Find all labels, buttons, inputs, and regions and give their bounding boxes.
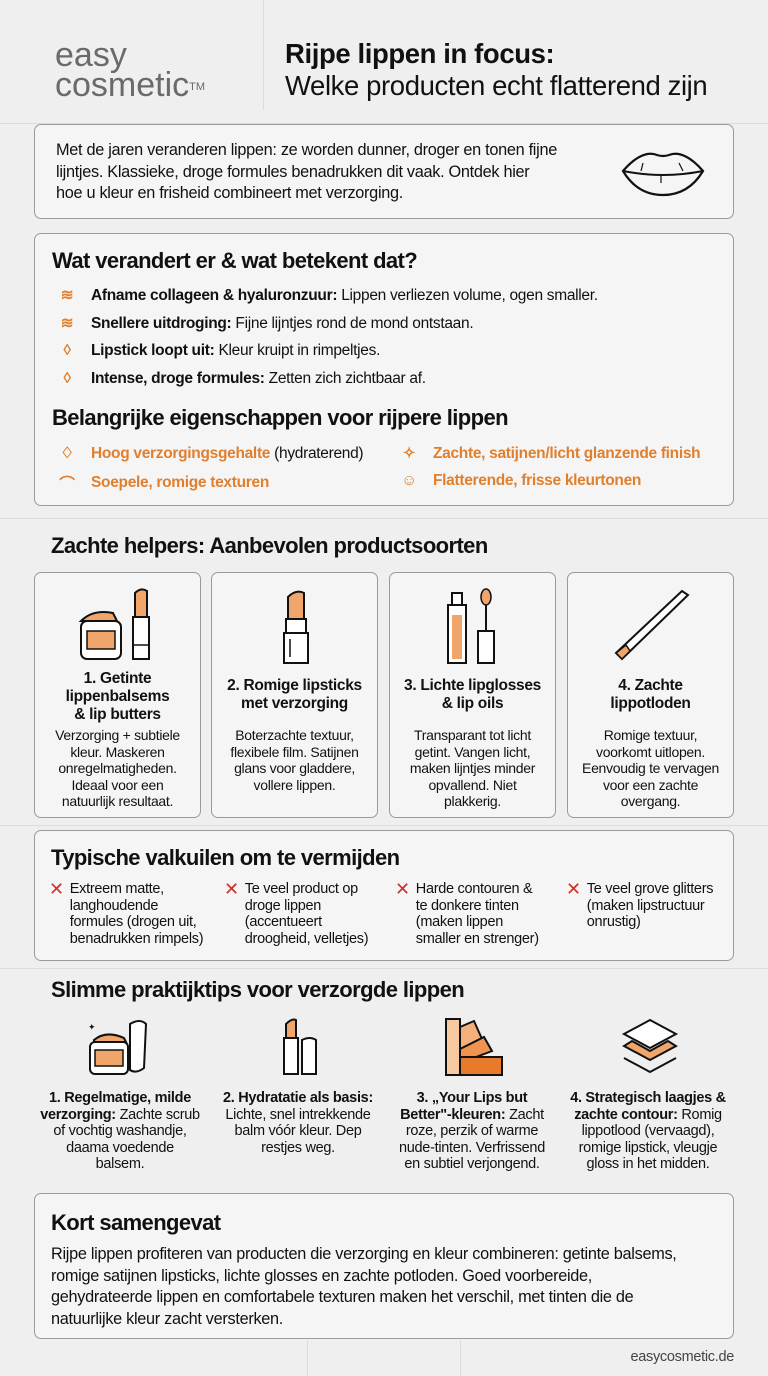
properties list: Hoog verzorgingsgehalte (hydraterend): [91, 444, 363, 462]
icon: lip pencil: [614, 590, 690, 660]
card 1: & lip butters: [74, 706, 161, 723]
card 3: 3. Lichte lipglosses: [404, 677, 541, 694]
change list: Lipstick loopt uit: Kleur kruipt in rimpeltjes.: [91, 342, 380, 359]
change list: [61, 286, 598, 387]
tip 3: 3. „Your Lips but Better"-kleuren: Zacht roze, perzik of warme nude-tinten. Verfrissend en subtiel verjongend.: [399, 1090, 545, 1172]
properties list: Zachte, satijnen/licht glanzende finish: [433, 444, 700, 462]
card 4: lippotloden: [610, 695, 691, 712]
pitfall 2: droge lippen: [245, 898, 321, 914]
heading: products: Zachte helpers: Aanbevolen productsoorten: [51, 533, 488, 558]
icon: lipstick: [283, 1018, 317, 1075]
summary text: [51, 1245, 677, 1328]
icon: jar with cloth: ✦: [88, 1022, 96, 1032]
pitfall 3: ✕: [395, 879, 410, 899]
pitfall 3: te donkere tinten: [416, 898, 519, 914]
heading: changes: Wat verandert er & wat betekent dat?: [52, 248, 417, 273]
intro text: Met de jaren veranderen lippen: ze worden dunner, droger en tonen fijne: [56, 141, 557, 159]
tip 4: 4. Strategisch laagjes & zachte contour: Romig lippotlood (vervaagd), romige lipstick, vleugje gloss in het midden.: [570, 1090, 726, 1172]
properties list: [59, 444, 700, 493]
footer url: easycosmetic.de: [630, 1349, 734, 1365]
icon: lipstick: [283, 590, 309, 664]
heading: properties: Belangrijke eigenschappen voor rijpere lippen: [52, 405, 508, 430]
pitfall 1: benadrukken rimpels): [70, 930, 203, 946]
pitfall 4: [566, 879, 713, 930]
pitfall 2: droogheid, velletjes): [245, 930, 368, 946]
summary text: romige satijnen lipsticks, lichte glosses en zachte potloden. Goed voorbereide,: [51, 1266, 592, 1284]
summary text: gehydrateerde lippen en comfortabele texturen maken het verschil, met tinten die de: [51, 1288, 633, 1306]
card 4: [567, 572, 734, 818]
pitfall 3: (maken lippen: [416, 914, 503, 930]
title: Welke producten echt flatterend zijn: [285, 70, 707, 101]
properties list: Soepele, romige texturen: [91, 474, 269, 491]
title: [285, 38, 707, 101]
card 1: [34, 572, 201, 818]
card 2: 2. Romige lipsticks: [227, 677, 362, 694]
pitfall 3: [395, 879, 539, 946]
change list: Afname collageen & hyaluronzuur: Lippen verliezen volume, ogen smaller.: [91, 286, 598, 304]
card 2: [211, 572, 378, 818]
pitfall 2: ✕: [224, 879, 239, 899]
pitfall 2: [224, 879, 368, 946]
tip 2: 2. Hydratatie als basis: Lichte, snel intrekkende balm vóór kleur. Dep restjes weg.: [223, 1090, 373, 1156]
properties list: ✧: [403, 445, 415, 462]
change list: ≋: [61, 287, 73, 304]
properties list: Flatterende, frisse kleurtonen: [433, 472, 641, 489]
summary text: Rijpe lippen profiteren van producten die verzorging en kleur combineren: getinte balsems,: [51, 1245, 677, 1263]
title: Rijpe lippen in focus:: [285, 38, 554, 69]
pitfall 1: ✕: [49, 879, 64, 899]
properties list: ☺: [401, 472, 417, 489]
intro panel: [34, 124, 734, 219]
pitfall 4: onrustig): [587, 914, 641, 930]
card 2: Boterzachte textuur, flexibele film. Satijnen glans voor gladdere, vollere lippen.: [230, 727, 359, 792]
properties list: ♢: [60, 445, 74, 462]
pitfall 2: Te veel product op: [245, 881, 358, 897]
change list: ◊: [63, 342, 71, 359]
change list: ◊: [63, 370, 71, 387]
card 2: met verzorging: [241, 695, 348, 712]
card 1: 1. Getinte: [84, 670, 151, 687]
pitfall 4: Te veel grove glitters: [587, 881, 713, 897]
icon: balm jar and lipstick: [78, 588, 150, 660]
pitfall 2: (accentueert: [245, 914, 322, 930]
icon: colour fan: [445, 1018, 503, 1076]
card 4: Romige textuur, voorkomt uitlopen. Eenvoudig te vervagen voor een zachte overgang.: [582, 727, 719, 809]
icon: lips: [622, 152, 704, 196]
change list: Snellere uitdroging: Fijne lijntjes rond de mond ontstaan.: [91, 314, 473, 332]
pitfall 1: formules (drogen uit,: [70, 914, 196, 930]
heading: summary: Kort samengevat: [51, 1210, 221, 1235]
summary text: natuurlijke kleur zacht versterken.: [51, 1310, 283, 1328]
icon: lipgloss: [447, 588, 495, 664]
pitfall 3: Harde contouren &: [416, 881, 532, 897]
intro text: [56, 141, 557, 202]
heading: pitfalls: Typische valkuilen om te vermijden: [51, 845, 399, 870]
logo: [55, 36, 205, 104]
intro text: hoe u kleur en frisheid combineert met verzorging.: [56, 184, 403, 202]
panel: pitfalls: [34, 830, 734, 961]
tip 1: 1. Regelmatige, milde verzorging: Zachte scrub of vochtig washandje, daama voedende balsem.: [40, 1090, 200, 1172]
icon: jar with cloth: [88, 1020, 147, 1075]
pitfall 4: (maken lipstructuur: [587, 898, 704, 914]
card 3: Transparant tot licht getint. Vangen licht, maken lijntjes minder opvallend. Niet plakkerig.: [410, 727, 535, 809]
card 1: Verzorging + subtiele kleur. Maskeren onregelmatigheden. Ideaal voor een natuurlijk resultaat.: [55, 727, 180, 809]
pitfall 1: [49, 879, 203, 946]
properties list: ⌒: [59, 476, 75, 493]
pitfall 4: ✕: [566, 879, 581, 899]
change list: Intense, droge formules: Zetten zich zichtbaar af.: [91, 370, 426, 387]
intro text: lijntjes. Klassieke, droge formules benadrukken dit vaak. Ontdek hier: [56, 162, 529, 180]
card 3: [389, 572, 556, 818]
icon: layers: [622, 1018, 678, 1074]
panel: changes & properties: [34, 233, 734, 506]
heading: tips: Slimme praktijktips voor verzorgde lippen: [51, 977, 464, 1002]
logo: cosmeticTM: [55, 66, 205, 104]
card 4: 4. Zachte: [618, 677, 683, 694]
pitfall 1: Extreem matte,: [70, 881, 164, 897]
panel: summary: [34, 1193, 734, 1339]
change list: ≋: [61, 315, 73, 332]
logo: easy: [55, 36, 127, 74]
card 3: & lip oils: [442, 695, 503, 712]
pitfall 3: smaller en strenger): [416, 930, 539, 946]
card 1: lippenbalsems: [66, 688, 169, 705]
pitfall 1: langhoudende: [70, 898, 158, 914]
